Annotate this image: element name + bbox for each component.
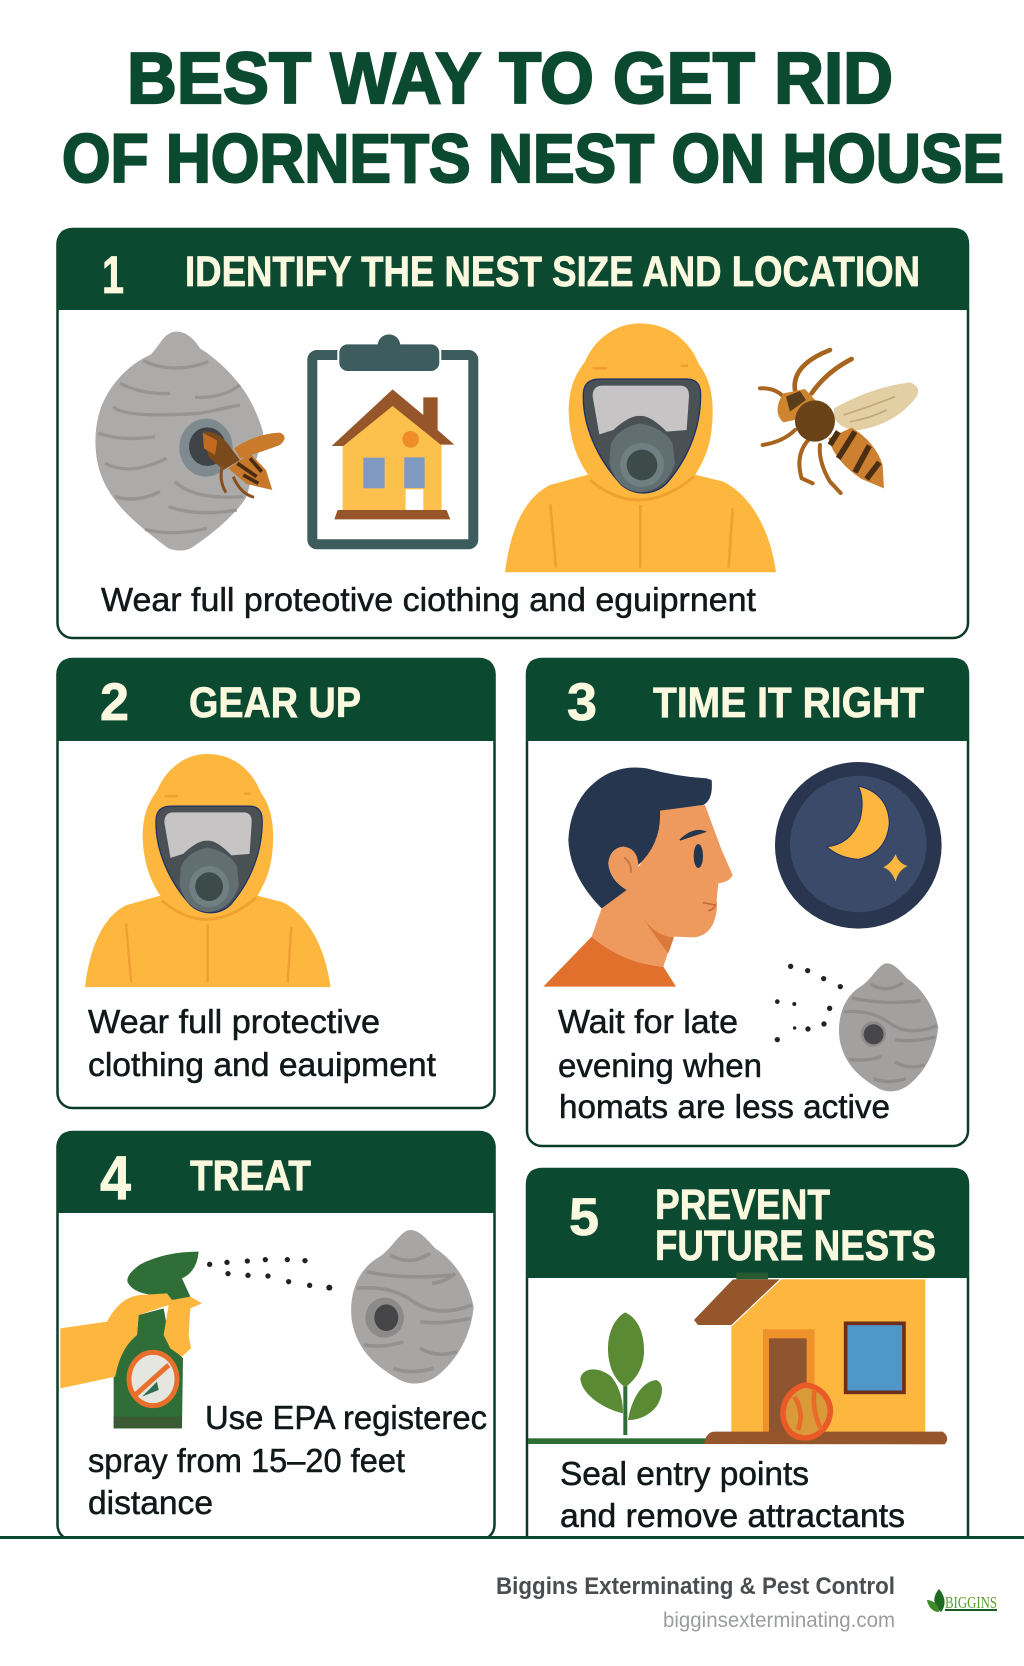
title xyxy=(62,39,1004,197)
step 4 text: Use EPA registerec xyxy=(205,1399,487,1436)
flying dots xyxy=(775,964,843,1042)
step 5 text xyxy=(560,1455,905,1534)
icon: hand with spray bottle xyxy=(60,1252,332,1428)
icon: nest with hornets xyxy=(775,963,938,1091)
step 3 header xyxy=(526,658,969,741)
step 1 header: IDENTIFY THE NEST SIZE AND LOCATION xyxy=(185,248,920,296)
step 5 text: Seal entry points xyxy=(560,1455,809,1492)
step 1 header: 1 xyxy=(102,246,124,305)
title: BEST WAY TO GET RID xyxy=(127,39,893,119)
panel: step 5 prevent future nests xyxy=(526,1168,969,1599)
panel: step 4 treat xyxy=(57,1131,495,1540)
company name: Biggins Exterminating & Pest Control xyxy=(496,1573,895,1600)
footer xyxy=(0,1536,1024,1666)
icon: person in protective suit xyxy=(505,323,776,572)
step 3 header: TIME IT RIGHT xyxy=(653,679,924,727)
icon: man profile xyxy=(543,767,733,987)
step 4 header: 4 xyxy=(100,1144,131,1213)
logo: BIGGINS xyxy=(945,1593,997,1612)
step 2 text: Wear full protective xyxy=(88,1003,380,1040)
icon: person in protective suit xyxy=(85,754,331,987)
panel: step 3 time it right xyxy=(526,658,969,1146)
step 2 header xyxy=(57,658,495,741)
step 3 text: homats are less active xyxy=(559,1088,890,1125)
panel: step 2 gear up xyxy=(57,658,495,1108)
step 3 text: evening when xyxy=(558,1047,762,1084)
icon: plant xyxy=(580,1312,662,1435)
step 4 header: TREAT xyxy=(190,1152,311,1200)
icon: nest xyxy=(351,1230,474,1384)
step 4 header xyxy=(57,1131,495,1213)
spray dots xyxy=(207,1257,332,1291)
step 1 text: Wear full proteotive ciothing and eguiprnent xyxy=(101,581,756,618)
panel: step 1 identify xyxy=(57,228,969,638)
icon: clipboard with house xyxy=(312,334,473,544)
step 4 text: spray from 15–20 feet xyxy=(88,1442,405,1479)
step 5 header: PREVENT xyxy=(655,1181,830,1229)
step 3 text: Wait for late xyxy=(558,1003,738,1040)
step 4 text: distance xyxy=(88,1484,213,1521)
step 3 header: 3 xyxy=(567,673,597,732)
step 5 text: and remove attractants xyxy=(560,1497,905,1534)
step 4 text xyxy=(88,1399,487,1521)
step 1 header xyxy=(57,228,969,310)
website: bigginsexterminating.com xyxy=(663,1609,895,1632)
icon: hornet xyxy=(760,350,918,493)
step 2 text xyxy=(88,1003,436,1083)
step 5 header: 5 xyxy=(569,1188,599,1247)
icon: house with sealed entry xyxy=(528,1273,947,1444)
step 5 header: FUTURE NESTS xyxy=(655,1222,936,1270)
icon: moon and star xyxy=(775,762,942,929)
icon: nest with hornet xyxy=(95,332,285,551)
step 2 text: clothing and eauipment xyxy=(88,1046,436,1083)
step 3 text xyxy=(558,1003,890,1125)
logo xyxy=(927,1589,997,1612)
step 5 header xyxy=(526,1168,969,1278)
step 2 header: 2 xyxy=(100,673,129,732)
step 2 header: GEAR UP xyxy=(189,679,361,727)
